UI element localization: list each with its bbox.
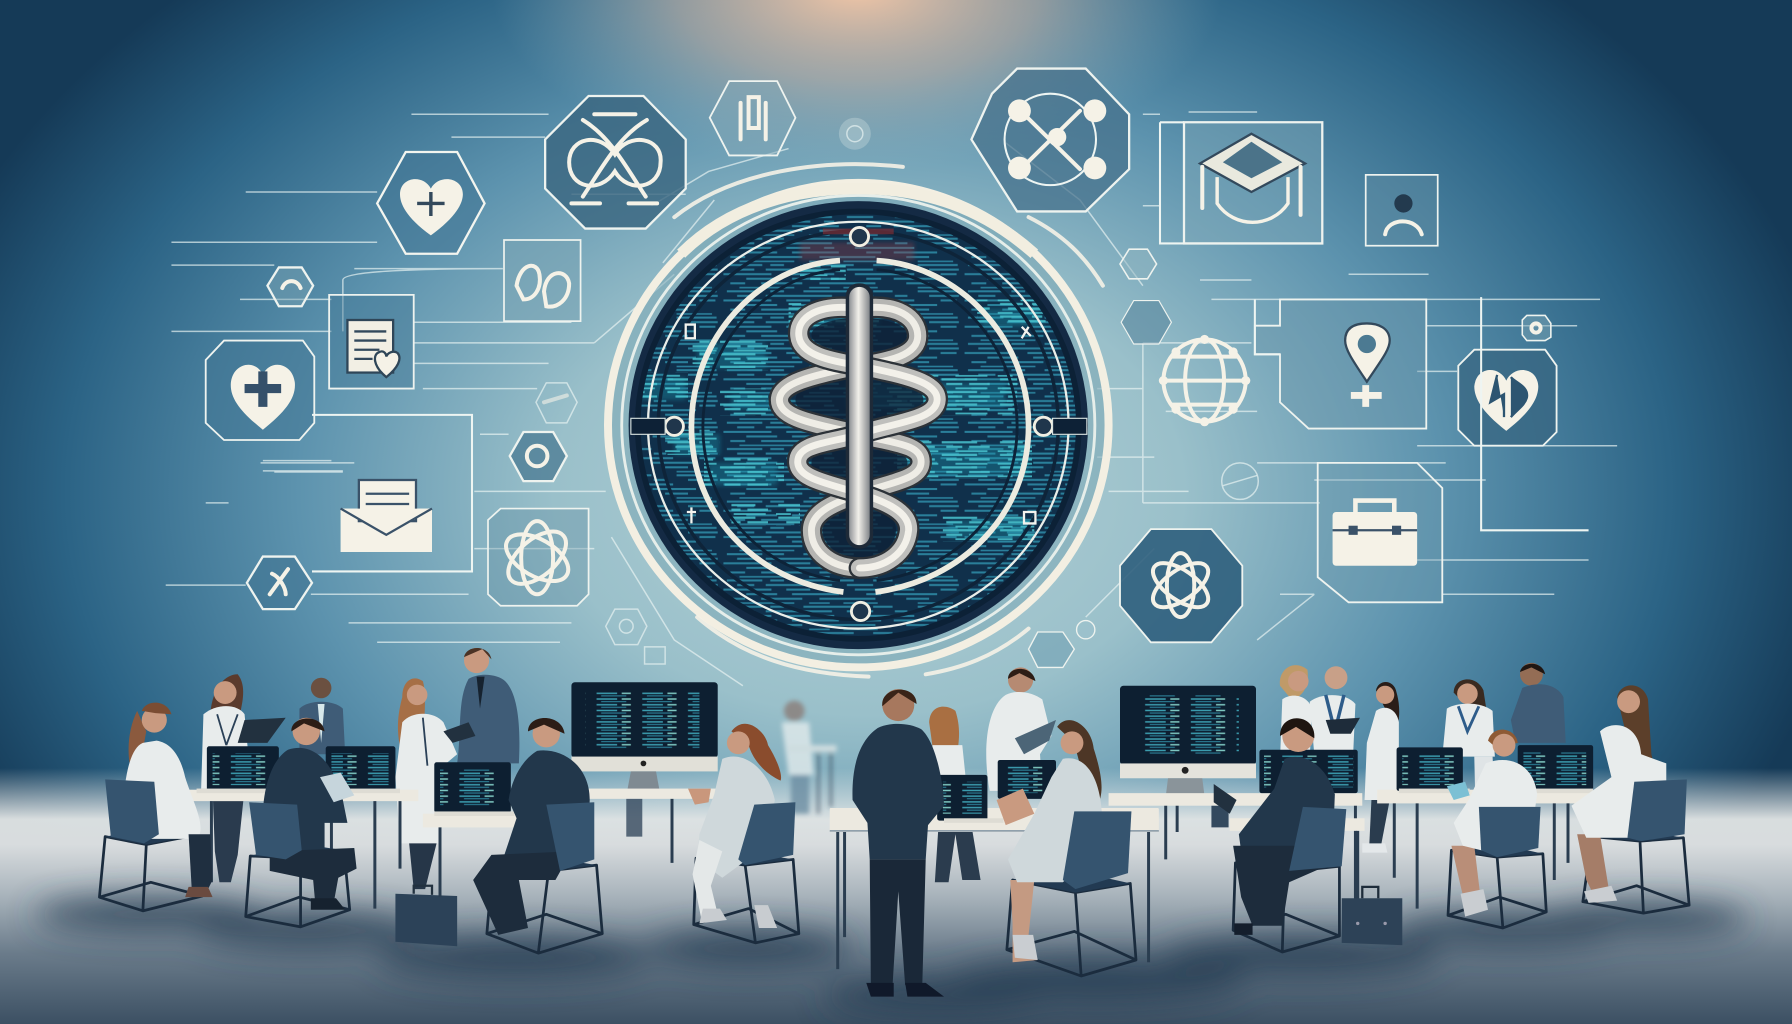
circuit lines left bbox=[166, 114, 789, 686]
loop interiors bbox=[795, 318, 923, 558]
standing group right bbox=[1280, 663, 1566, 857]
serpent strand in front bbox=[798, 307, 937, 568]
inner ring arcs bbox=[638, 211, 1079, 639]
seated woman center with tablet and chair bbox=[688, 724, 799, 943]
frame: right connector bbox=[1255, 297, 1589, 530]
female doctor bbox=[1442, 679, 1495, 757]
seated man left with chair bbox=[246, 718, 357, 927]
code disc bbox=[629, 201, 1088, 649]
icon: faint top circle bbox=[839, 118, 871, 150]
standing doctor woman with tablet bbox=[201, 674, 286, 882]
icon: heart with pulse bbox=[1458, 350, 1557, 446]
icon: graduation cap box bbox=[1160, 122, 1322, 243]
icon: envelope in frame bbox=[263, 415, 472, 571]
nurse with ponytail bbox=[1280, 665, 1312, 760]
icon: location pin with plus bbox=[1255, 299, 1426, 429]
desktop monitor left bbox=[571, 682, 718, 790]
icon: footprints square bbox=[504, 240, 581, 321]
ring clasps bbox=[631, 227, 1087, 621]
woman doctor with long hair bbox=[395, 678, 457, 889]
standing man in suit bbox=[443, 648, 519, 763]
blurred distant person and table bbox=[782, 701, 837, 814]
table behind seated man bbox=[1230, 818, 1365, 903]
small table with laptop bbox=[423, 762, 523, 897]
back table left bbox=[589, 789, 737, 863]
icon: portrait square bbox=[1366, 175, 1438, 246]
icon: globe network bbox=[1159, 335, 1250, 426]
icon: atom box bbox=[488, 509, 589, 606]
laptop rear bbox=[998, 760, 1056, 799]
front table with laptops bbox=[830, 760, 1159, 969]
icons: faint lower hexagons bbox=[606, 609, 665, 664]
seated woman far right with chair bbox=[1571, 685, 1689, 913]
standing man front center bbox=[852, 689, 944, 997]
seated woman front with chair bbox=[997, 720, 1136, 976]
back table right bbox=[1109, 793, 1362, 903]
icon: lower left hexagon bbox=[247, 557, 312, 609]
circuit lines right bbox=[1006, 112, 1617, 640]
floor shadows bbox=[34, 897, 1749, 1015]
floor bbox=[0, 768, 1792, 1024]
table with laptops right bbox=[1377, 745, 1593, 909]
man in blue suit bbox=[1511, 663, 1566, 743]
icon: small hexagon upper left bbox=[267, 267, 313, 306]
icon: small capsule hexagon bbox=[710, 81, 795, 155]
table with laptops left bbox=[187, 746, 418, 909]
staff bbox=[846, 283, 873, 549]
briefcase on floor left bbox=[395, 886, 457, 946]
laptop front bbox=[937, 775, 1003, 823]
icon: knot small hexagon bbox=[510, 432, 567, 481]
icon: molecule network octagon bbox=[971, 69, 1129, 211]
icon: faint hexagon bbox=[536, 383, 577, 423]
desktop monitor right bbox=[1120, 686, 1256, 797]
seated woman left with chair bbox=[99, 703, 213, 911]
back woman and doctor center bbox=[929, 667, 1056, 882]
icon: heart with plus bbox=[377, 152, 485, 254]
icon: document with heart bbox=[329, 295, 414, 389]
icon: knot octagon bbox=[545, 96, 686, 229]
icon: heart with cross bbox=[206, 341, 314, 440]
back person: man with lanyard bbox=[299, 678, 345, 754]
laptop bbox=[197, 746, 283, 793]
icon: tiny right badge bbox=[1522, 315, 1551, 341]
seated man right with chair bbox=[1214, 718, 1346, 952]
laptop bbox=[1397, 747, 1470, 793]
icon: faint circle marker bbox=[1222, 463, 1258, 499]
laptop bbox=[434, 762, 514, 816]
laptop on back table bbox=[1259, 750, 1358, 793]
seated man center-left with chair bbox=[473, 718, 602, 953]
woman in coat bbox=[1362, 682, 1399, 853]
icons: lower right small bbox=[1029, 621, 1095, 667]
emblem: medical caduceus with code bbox=[608, 164, 1109, 677]
icon: atom octagon bbox=[1120, 529, 1242, 642]
briefcase on floor right bbox=[1342, 887, 1402, 945]
legs of doctor bbox=[1474, 757, 1497, 857]
icon: faint right hexagons bbox=[1120, 249, 1171, 344]
icon: briefcase bbox=[1318, 463, 1442, 602]
laptop bbox=[322, 746, 400, 793]
male doctor bbox=[1310, 666, 1360, 754]
seated woman right with chair bbox=[1447, 730, 1546, 928]
outer ring bbox=[608, 164, 1109, 677]
serpent strand behind bbox=[779, 307, 921, 568]
laptop bbox=[1515, 745, 1593, 793]
